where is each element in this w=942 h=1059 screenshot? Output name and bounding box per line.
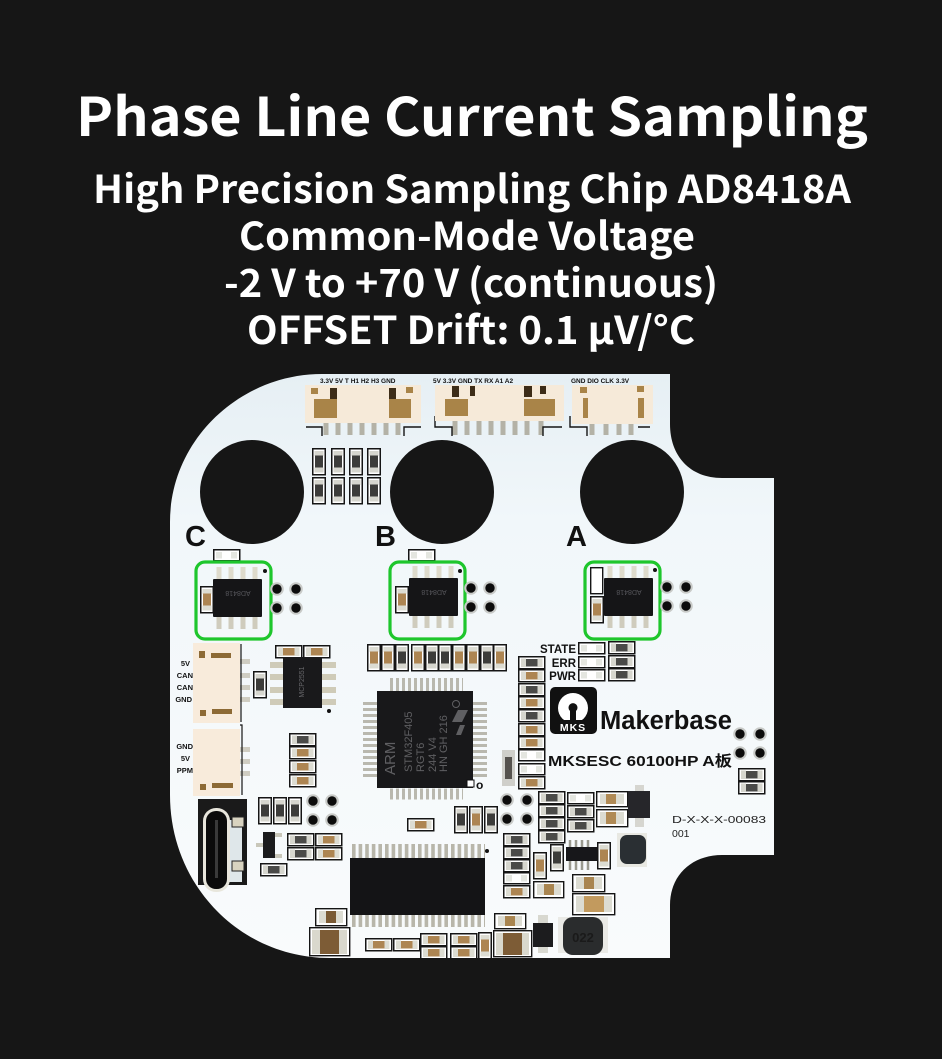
subtitle: common-mode voltage: Common-Mode Voltage (239, 206, 695, 262)
component column beside MCU (502, 657, 545, 789)
circuit board (170, 374, 774, 959)
board serial text: D-X-X-X-00083 (672, 814, 766, 826)
diode and inductors: 022 (572, 930, 594, 945)
top connectors: 3.3V 5V T H1 H2 H3 GND (320, 378, 396, 385)
left connectors: GND (176, 742, 194, 751)
title: Phase Line Current Sampling (76, 76, 868, 152)
diode and inductors (533, 833, 647, 955)
chip B with green highlight: AD8418 (421, 588, 447, 595)
CAN transceiver chip (254, 646, 336, 713)
Makerbase MKS logo (550, 687, 597, 734)
row of components above MCU (368, 645, 506, 671)
chip A with green highlight (585, 562, 660, 639)
USB-C port (198, 799, 247, 892)
CAN transceiver chip: MCP2551 (299, 666, 306, 698)
left connectors: PPM (177, 766, 193, 775)
right-side power components (504, 769, 765, 915)
subtitle: chip name: High Precision Sampling Chip AD8418A (93, 159, 851, 215)
board model text: MKSESC 60100HP A板 (548, 752, 732, 770)
subtitle: offset drift: OFFSET Drift: 0.1 µV/°C (247, 300, 695, 356)
status LED indicators (540, 642, 635, 683)
left connectors: 5V (181, 659, 190, 668)
board serial text (672, 814, 766, 840)
chip C with green highlight (196, 562, 271, 639)
top connectors: 5V 3.3V GND TX RX A1 A2 (433, 378, 513, 385)
regulator and nearby resistors (256, 807, 497, 876)
left connectors: CAN (177, 671, 193, 680)
top connectors: GND DIO CLK 3.3V (571, 378, 630, 385)
phase labels (185, 521, 587, 553)
bottom capacitors (310, 909, 532, 959)
MCU chip STM32F405: STM32F405 (403, 711, 415, 772)
top connectors (305, 378, 653, 436)
chip C with green highlight: AD8418 (225, 589, 251, 596)
capacitors above chips (214, 550, 435, 561)
chip A with green highlight: AD8418 (616, 588, 642, 595)
MCU chip STM32F405: RGT6 (415, 743, 427, 772)
brand text: Makerbase (600, 707, 732, 735)
left connectors: 5V (181, 754, 190, 763)
subtitle block (93, 159, 851, 356)
MCU chip STM32F405 (370, 685, 483, 794)
Makerbase MKS logo: MKS (560, 722, 586, 734)
status LED indicators: STATE (540, 644, 576, 656)
board outline (170, 374, 774, 958)
MCU chip STM32F405: HN GH 216 (438, 715, 450, 772)
MCU chip STM32F405: ARM (382, 742, 399, 775)
phase labels: C (185, 521, 206, 553)
phase labels: B (375, 521, 396, 553)
left connectors: CAN (177, 683, 193, 692)
large driver chip (350, 849, 489, 921)
small component stack (259, 734, 316, 824)
MCU chip STM32F405: o (476, 778, 483, 792)
MCU chip STM32F405: 244 V4 (427, 737, 439, 772)
subtitle: voltage range: -2 V to +70 V (continuous) (224, 253, 718, 309)
via holes (270, 580, 767, 827)
resistor bank (313, 449, 380, 504)
chip B with green highlight (390, 562, 465, 639)
left connectors: GND (175, 695, 193, 704)
left connectors (175, 643, 250, 796)
phase labels: A (566, 521, 587, 553)
status LED indicators: ERR (552, 658, 577, 670)
board serial text: 001 (672, 828, 690, 840)
status LED indicators: PWR (549, 671, 577, 683)
phase wire holes (200, 440, 684, 544)
